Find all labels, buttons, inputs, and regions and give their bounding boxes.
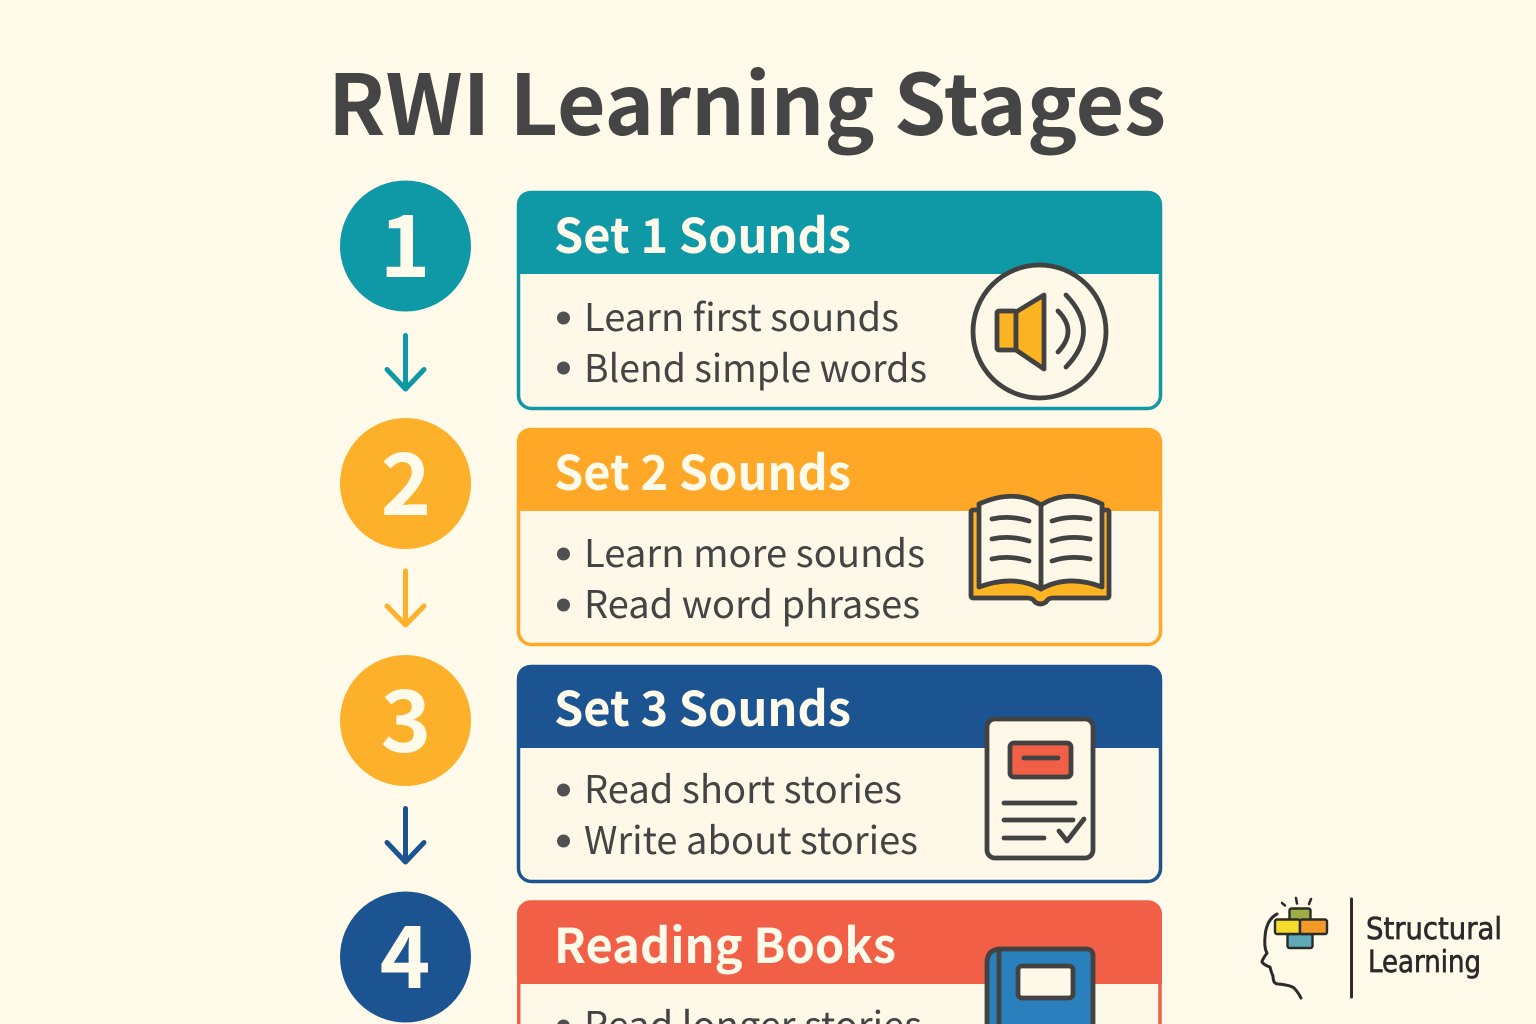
- panel: Set 3 Sounds: Write about stories: [584, 810, 918, 865]
- icon: open book: [971, 496, 1109, 604]
- logo divider: [1350, 899, 1353, 997]
- panel: Set 1 Sounds: Learn first sounds: [584, 287, 899, 342]
- title: RWI Learning Stages: [328, 39, 1166, 160]
- logo wordmark: [1366, 912, 1502, 980]
- icon: speaker: [973, 265, 1106, 398]
- panel: Reading Books: [517, 901, 1162, 1024]
- panel: Set 3 Sounds: Read short stories: [584, 759, 902, 814]
- panel: Set 2 Sounds: Read word phrases: [584, 574, 920, 629]
- panel: Set 1 Sounds: [517, 191, 1162, 408]
- stage 1 marker: [340, 177, 471, 312]
- panel: Reading Books: Reading Books: [554, 907, 896, 977]
- panel: Set 2 Sounds: [517, 428, 1162, 644]
- panel: Set 2 Sounds: Set 2 Sounds: [554, 434, 851, 504]
- stage 4 marker: 4: [380, 888, 430, 1013]
- icon: worksheet with check: [987, 719, 1093, 858]
- arrow: stage 1 to 2: [387, 336, 424, 389]
- stage 2 marker: 2: [381, 415, 431, 540]
- icon: closed book: [987, 949, 1093, 1024]
- panel: Set 3 Sounds: [517, 665, 1162, 882]
- panel: Set 1 Sounds: Blend simple words: [584, 338, 927, 393]
- logo icon: head with blocks: [1262, 898, 1327, 998]
- stage 3 marker: [340, 652, 471, 786]
- panel: Set 3 Sounds: Set 3 Sounds: [554, 670, 851, 740]
- stage 3 marker: 3: [381, 652, 431, 777]
- panel: Set 1 Sounds: Set 1 Sounds: [554, 197, 851, 267]
- logo wordmark: Structural: [1366, 912, 1502, 947]
- arrow: stage 3 to 4: [387, 808, 424, 862]
- logo: Structural Learning: [1262, 898, 1502, 998]
- panel: Set 2 Sounds: Learn more sounds: [584, 523, 925, 578]
- stage 2 marker: [340, 415, 471, 549]
- stage 1 marker: 1: [380, 177, 430, 302]
- stage 4 marker: [340, 888, 471, 1022]
- arrow: stage 2 to 3: [387, 571, 424, 625]
- logo wordmark: Learning: [1368, 945, 1481, 980]
